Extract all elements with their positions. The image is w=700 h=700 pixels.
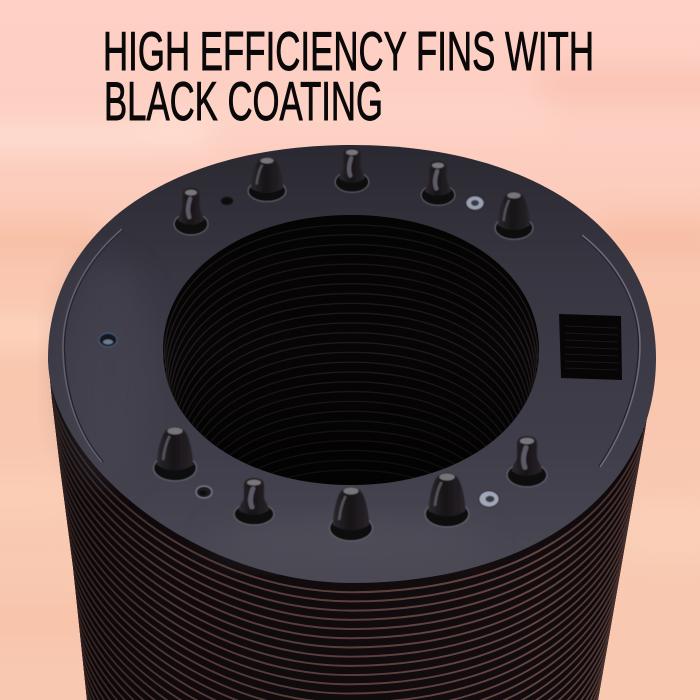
screw holes — [99, 196, 499, 507]
right groove — [581, 235, 640, 467]
central hole with inner fins — [163, 215, 539, 485]
finned cylinder body — [40, 350, 660, 700]
left groove — [63, 229, 123, 462]
title: BLACK COATING — [104, 70, 383, 132]
cooling fin lines — [49, 368, 654, 700]
rectangular slot — [559, 314, 622, 380]
title — [103, 20, 594, 132]
mounting pins: bottom row — [153, 427, 547, 541]
mounting pins: top row — [174, 148, 533, 239]
top plate — [48, 145, 656, 583]
